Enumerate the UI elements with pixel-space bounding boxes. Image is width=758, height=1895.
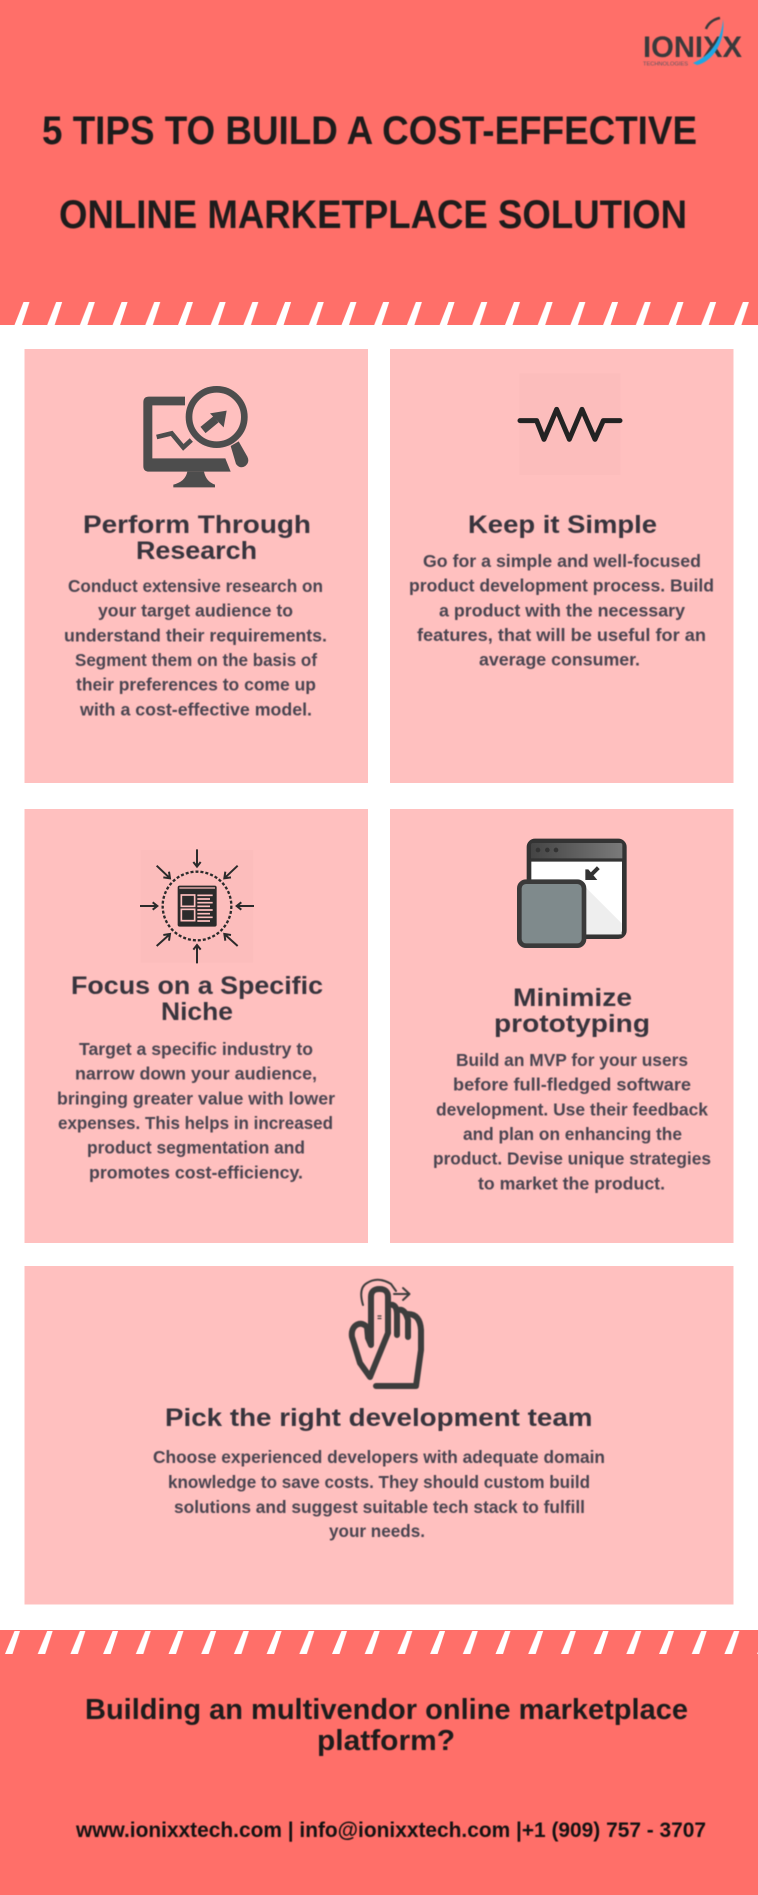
- icon: monitor with magnifier: [143, 389, 248, 487]
- body text: to market the product.: [478, 1173, 665, 1193]
- body text: your target audience to: [98, 601, 293, 621]
- body text: Build an MVP for your users: [456, 1050, 688, 1070]
- body text: [409, 551, 714, 670]
- panel: Focus on a Specific Niche: [24, 809, 368, 1243]
- heading: [494, 984, 650, 1038]
- heading: prototyping: [494, 1010, 650, 1038]
- body text: [64, 576, 327, 719]
- header banner: [0, 0, 758, 325]
- icon: window minimize: [519, 841, 624, 946]
- footer banner: [0, 1630, 758, 1895]
- heading: [71, 972, 323, 1026]
- body text: Choose experienced developers with adequate domain: [153, 1447, 605, 1467]
- icon: focus target with document: [140, 849, 254, 963]
- body text: product. Devise unique strategies: [433, 1149, 711, 1169]
- panel: Perform Through Research: [24, 349, 368, 783]
- heading: Niche: [161, 998, 233, 1026]
- heading: Focus on a Specific: [71, 972, 323, 1000]
- footer question: Building an multivendor online marketplace: [85, 1694, 688, 1726]
- title: ONLINE MARKETPLACE SOLUTION: [59, 193, 687, 237]
- panel: Pick the right development team: [24, 1266, 734, 1604]
- body text: narrow down your audience,: [75, 1064, 317, 1084]
- heading: Research: [136, 537, 257, 565]
- logo: Ionixx Technologies: TECHNOLOGIES: [643, 62, 688, 68]
- body text: [433, 1050, 711, 1193]
- body text: Target a specific industry to: [79, 1039, 313, 1059]
- icon: pointing hand with swipe arrow: [352, 1280, 421, 1386]
- body text: with a cost-effective model.: [79, 699, 312, 719]
- footer question: platform?: [317, 1725, 455, 1757]
- panel: Keep it Simple: [390, 349, 734, 783]
- body text: a product with the necessary: [439, 600, 685, 620]
- body text: product development process. Build: [409, 576, 714, 596]
- body text: solutions and suggest suitable tech stack to fulfill: [174, 1497, 585, 1517]
- title: [42, 109, 697, 237]
- body text: Segment them on the basis of: [75, 650, 317, 670]
- body text: before full-fledged software: [453, 1075, 691, 1095]
- heading: Minimize: [513, 984, 632, 1012]
- heading: Perform Through: [83, 511, 311, 539]
- body text: bringing greater value with lower: [57, 1088, 335, 1108]
- logo: Ionixx Technologies: [643, 18, 742, 68]
- body text: [153, 1447, 605, 1541]
- body text: their preferences to come up: [76, 675, 316, 695]
- heading: Keep it Simple: [468, 511, 657, 539]
- body text: Conduct extensive research on: [68, 576, 323, 596]
- panel: Minimize prototyping: [390, 809, 734, 1243]
- title: 5 TIPS TO BUILD A COST-EFFECTIVE: [42, 109, 697, 153]
- heading: [83, 511, 311, 565]
- body text: knowledge to save costs. They should custom build: [168, 1472, 590, 1492]
- body text: development. Use their feedback: [436, 1099, 708, 1119]
- icon: resistor zigzag: [519, 373, 621, 475]
- body text: expenses. This helps in increased: [58, 1113, 333, 1133]
- heading: Pick the right development team: [165, 1404, 592, 1432]
- contact details: www.ionixxtech.com | info@ionixxtech.com |+1 (909) 757 - 3707: [75, 1819, 706, 1842]
- body text: features, that will be useful for an: [417, 625, 706, 645]
- body text: understand their requirements.: [64, 625, 327, 645]
- body text: Go for a simple and well-focused: [423, 551, 701, 571]
- body text: product segmentation and: [87, 1138, 305, 1158]
- body text: [57, 1039, 335, 1182]
- logo: Ionixx Technologies: IONIXX: [643, 31, 742, 64]
- body text: your needs.: [329, 1521, 425, 1541]
- body text: promotes cost-efficiency.: [89, 1162, 303, 1182]
- body text: and plan on enhancing the: [463, 1124, 682, 1144]
- footer question: [85, 1694, 688, 1757]
- body text: average consumer.: [479, 650, 640, 670]
